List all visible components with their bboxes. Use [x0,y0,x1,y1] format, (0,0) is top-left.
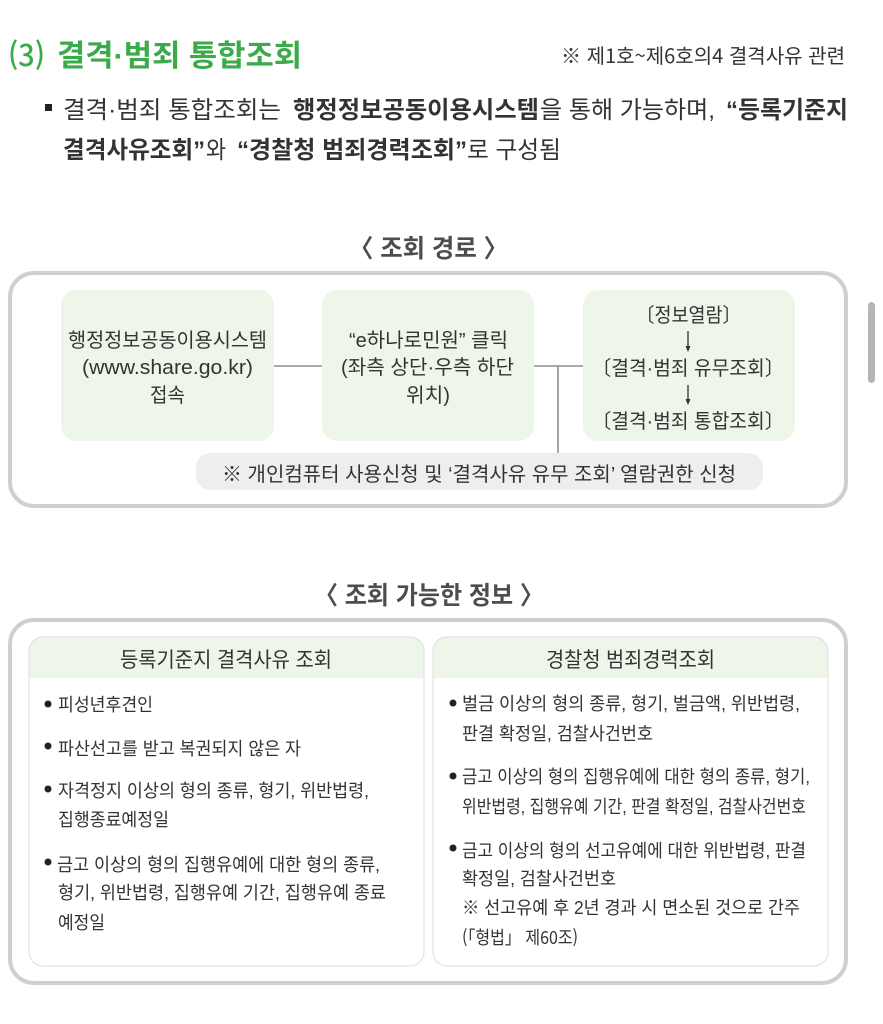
step 3: information view: 〔결격·범죄 유무조회〕 [592,357,784,380]
card: disqualification query: 자격정지 이상의 형의 종류, 형기, 위반법령, [58,781,369,801]
heading: query route: 〈 조회 경로 〉 [349,229,508,265]
step 1: system access: 행정정보공동이용시스템 [68,329,267,352]
step 1: system access: (www.share.go.kr) [82,357,253,379]
arrow: existence query to combined query [686,385,690,405]
step 3: information view: 〔결격·범죄 통합조회〕 [592,410,784,433]
card: disqualification query: 예정일 [58,913,105,933]
step 2: e-hanaro click: (좌측 상단·우측 하단 [341,356,514,379]
card: disqualification query: 파산선고를 받고 복권되지 않은 자 [58,739,301,759]
card: criminal record query: 벌금 이상의 형의 종류, 형기, 벌금액, 위반법령, [462,694,800,714]
step 1: system access [61,290,274,441]
note pill: ※ 개인컴퓨터 사용신청 및 ‘결격사유 유무 조회’ 열람권한 신청 [222,463,736,486]
step 2: e-hanaro click: “e하나로민원” 클릭 [349,329,508,352]
intro text block: 와 [206,137,226,164]
card: criminal record query: 확정일, 검찰사건번호 [462,869,616,889]
card: criminal record query: 금고 이상의 형의 집행유예에 대한 형의 종류, 형기, [462,767,810,787]
intro text block: 결격·범죄 통합조회는 [63,97,281,124]
step 1: system access: 접속 [150,384,185,407]
intro text block: “등록기준지 [726,97,848,124]
heading: available information: 〈 조회 가능한 정보 〉 [314,576,544,612]
note pill [196,453,763,490]
panel: query route [10,273,846,506]
step 3: information view [583,290,795,441]
intro text block: 결격사유조회” [63,137,205,164]
title: 결격·범죄 통합조회 [57,40,302,73]
intro text block: 을 통해 가능하며, [540,97,715,124]
card: disqualification query: 등록기준지 결격사유 조회 [120,649,332,672]
panel: available information [10,620,846,983]
arrow: view to existence query [686,331,690,352]
intro text block [45,97,848,164]
card: disqualification query [29,637,424,966]
card: criminal record query: 위반법령, 집행유예 기간, 판결 확정일, 검찰사건번호 [462,797,806,817]
step 2: e-hanaro click [322,290,534,441]
card: disqualification query: 금고 이상의 형의 집행유예에 대한 형의 종류, [57,855,380,875]
intro text block: 행정정보공동이용시스템 [293,97,539,124]
legal reference note: ※ 제1호~제6호의4 결격사유 관련 [561,40,845,69]
scrollbar [868,302,875,383]
intro text block: “경찰청 범죄경력조회” [237,137,467,164]
card: criminal record query: 판결 확정일, 검찰사건번호 [462,724,653,744]
card: disqualification query: 집행종료예정일 [58,810,169,830]
step 2: e-hanaro click: 위치) [406,384,450,407]
card: disqualification query: 형기, 위반법령, 집행유예 기간, 집행유예 종료 [58,883,386,903]
title: (3) [8,31,45,75]
card: criminal record query: ※ 선고유예 후 2년 경과 시 면소된 것으로 간주 [462,898,800,918]
title [8,31,302,75]
card: criminal record query: 금고 이상의 형의 선고유예에 대한 위반법령, 판결 [462,841,806,861]
card: criminal record query: 경찰청 범죄경력조회 [546,649,715,672]
card: criminal record query [433,637,828,966]
step 3: information view: 〔정보열람〕 [636,304,741,327]
card: criminal record query: (「형법」 제60조) [462,924,578,950]
intro text block: 로 구성됨 [467,137,561,164]
card: disqualification query: 피성년후견인 [58,695,153,715]
